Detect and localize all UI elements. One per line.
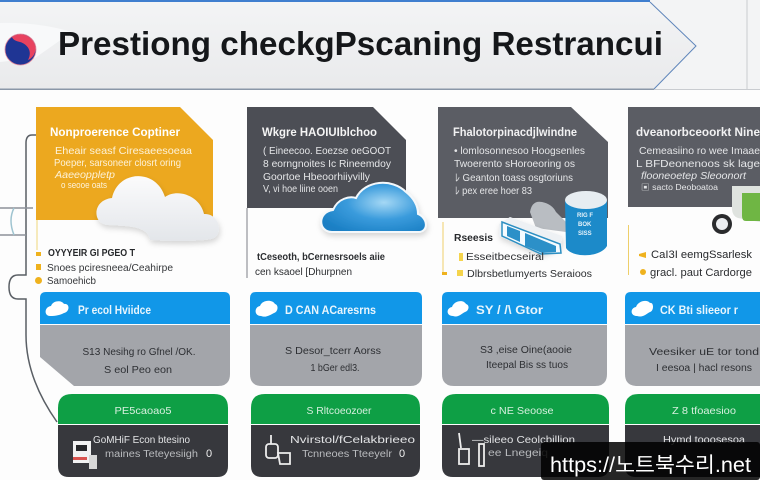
card: blue info 3 [442, 292, 607, 386]
card text: 1 bGer edl3. [310, 363, 360, 374]
card label: PE5caoao5 [114, 406, 172, 417]
card text: Tcnneoes Tteeyelr [302, 449, 393, 460]
card text: maines Teteyesiigh [105, 449, 198, 460]
column 3 list: Esseitbecseiral [466, 252, 544, 263]
panel 3 text: • lomlosonnesoo Hoogsenles [454, 145, 585, 157]
card text: —sileeo Ceolcbillion [472, 435, 575, 446]
orange panel text [54, 145, 192, 191]
orange panel heading: Nonproerence Coptiner [50, 127, 181, 139]
panel 3 text: Twoerento sHoroeoring os [454, 158, 575, 170]
card heading: Pr ecol Hviidce [78, 305, 151, 317]
icon: scanner and canister [499, 191, 607, 255]
panel 4 text [636, 145, 760, 192]
column 4 list: CaI3I eemgSsarlesk [651, 249, 753, 261]
panel: orange column [36, 107, 213, 220]
icon: cloud [448, 301, 469, 317]
card text [649, 347, 759, 374]
icon: cloud [46, 301, 68, 316]
column 2 text: cen ksaoel [Dhurpnen [255, 267, 352, 278]
icon: scanner and canister: RIG F [577, 213, 593, 219]
panel 3 text: ﾚ pex eree hoer 83 [455, 185, 532, 197]
panel 4 heading: dveanorbceoorkt Nine [636, 127, 760, 139]
column 4 list [628, 225, 753, 279]
icon: device [459, 433, 484, 466]
icon: white cloud [96, 176, 219, 241]
panel: dark column 2 [246, 107, 406, 278]
column 4 list: gracl. paut Cardorge [650, 267, 752, 279]
card: green and dark 4 [625, 394, 760, 477]
card text [93, 435, 212, 460]
card text [285, 346, 381, 374]
connector lines [0, 135, 57, 422]
card heading: CK Bti slieeor r [660, 305, 738, 317]
card text: ee Lnegeiq [488, 448, 548, 459]
card text: S13 Nesihg ro Gfnel /OK. [82, 346, 196, 358]
card text: Iteepal Bis ss tuos [486, 360, 568, 371]
orange panel text: o seooe oats [61, 180, 107, 191]
column 2 text: tCeseoth, bCernesrsoels aiie [257, 252, 385, 263]
icon: green device and dial [712, 186, 760, 234]
card text: 0 [206, 448, 212, 460]
icon: scanner and canister: BOK [578, 222, 592, 228]
card text: I eesoa | hacl resons [656, 363, 752, 374]
card text: Veesiker uE tor tond [649, 347, 759, 358]
title: Prestiong checkgPscaning Restrancui [58, 25, 663, 62]
card text: GoMHiF Econ btesino [93, 435, 190, 446]
panel 4 text: ▣ sacto Deoboatoa [641, 183, 719, 192]
card text [480, 345, 572, 371]
orange panel text: Poeper, sarsoneer closrt oring [54, 157, 181, 169]
card text [82, 346, 196, 376]
card heading: SY / /\ Gtor [476, 305, 544, 317]
header banner [0, 0, 760, 90]
panel: dark column 4 [628, 107, 760, 207]
panel 3 text: ﾚ Geanton toass osgtoriuns [455, 172, 573, 184]
orange column list: Samoehicb [47, 276, 96, 287]
icon: blue cloud [321, 183, 426, 232]
column 2 text [255, 252, 385, 278]
orange column list: OYYYEIR GI PGEO T [48, 247, 135, 259]
dark panel text [263, 145, 392, 195]
card label: Z 8 tfoaesioo [672, 406, 736, 417]
card: green and dark 1 [58, 394, 228, 477]
column 3 list [442, 222, 592, 280]
card label: c NE Seoose [490, 406, 554, 417]
card: green and dark 3 [442, 394, 609, 477]
card text [290, 435, 416, 460]
card text: S eol Peo eon [104, 364, 172, 376]
panel 3 text [454, 145, 585, 197]
icon: device [73, 441, 97, 469]
card label: S Rltcoeozoer [306, 406, 372, 417]
icon: cloud [632, 301, 653, 317]
panel 3 heading: Fhalotorpinacdjlwindne [453, 127, 577, 139]
icon: scanner and canister: SISS [578, 231, 592, 237]
dark panel text: 8 eorngnoites Ic Rineemdoy [263, 158, 392, 170]
orange column list [35, 220, 173, 287]
icon: device [266, 435, 290, 464]
card heading: D CAN ACaresrns [285, 305, 376, 317]
card text: Hymd tooosesoa [663, 435, 745, 446]
panel 4 text: L BFDeonenoos sk lage [636, 158, 760, 170]
dark panel heading: Wkgre HAOIUIblchoo [262, 127, 377, 139]
column 3 list: Rseesis [454, 233, 493, 244]
card: green and dark 2 [251, 394, 420, 477]
orange panel text: Aaeeoppletp [54, 169, 115, 181]
card text [472, 435, 575, 459]
dark panel text: Goortoe Hbeoorhiiyvilly [263, 171, 371, 183]
dark panel text: V, vi hoe liine ooen [263, 183, 338, 195]
card: blue info 2 [250, 292, 422, 386]
icon: cloud [256, 301, 278, 317]
icon: flag emblem [5, 34, 36, 65]
column 3 list: Dlbrsbetlumyerts Seraioos [467, 269, 592, 280]
orange column list: Snoes pciresneea/Ceahirpe [47, 263, 173, 274]
panel 4 text: flooneoetep Sleoonort [641, 170, 747, 182]
card text: S3 ,eise Oine(aooie [480, 345, 572, 356]
panel 4 text: Cemeasiino ro wee Imaae [639, 145, 760, 157]
card text: S Desor_tcerr Aorss [285, 346, 381, 357]
watermark: https://노트북수리.net [550, 454, 751, 477]
card: blue info 1 [40, 292, 230, 386]
panel: dark column 3 [438, 107, 608, 218]
card: blue info 4 [625, 292, 760, 386]
card text: 0 [399, 448, 405, 460]
dark panel text: ( Eineecoo. Eoezse oeGOOT [263, 145, 392, 157]
card text: Nvirstol/fCelakbrieeo [290, 435, 416, 446]
orange panel text: Eheair seasf Ciresaeesoeaa [55, 145, 192, 157]
watermark [541, 442, 760, 480]
